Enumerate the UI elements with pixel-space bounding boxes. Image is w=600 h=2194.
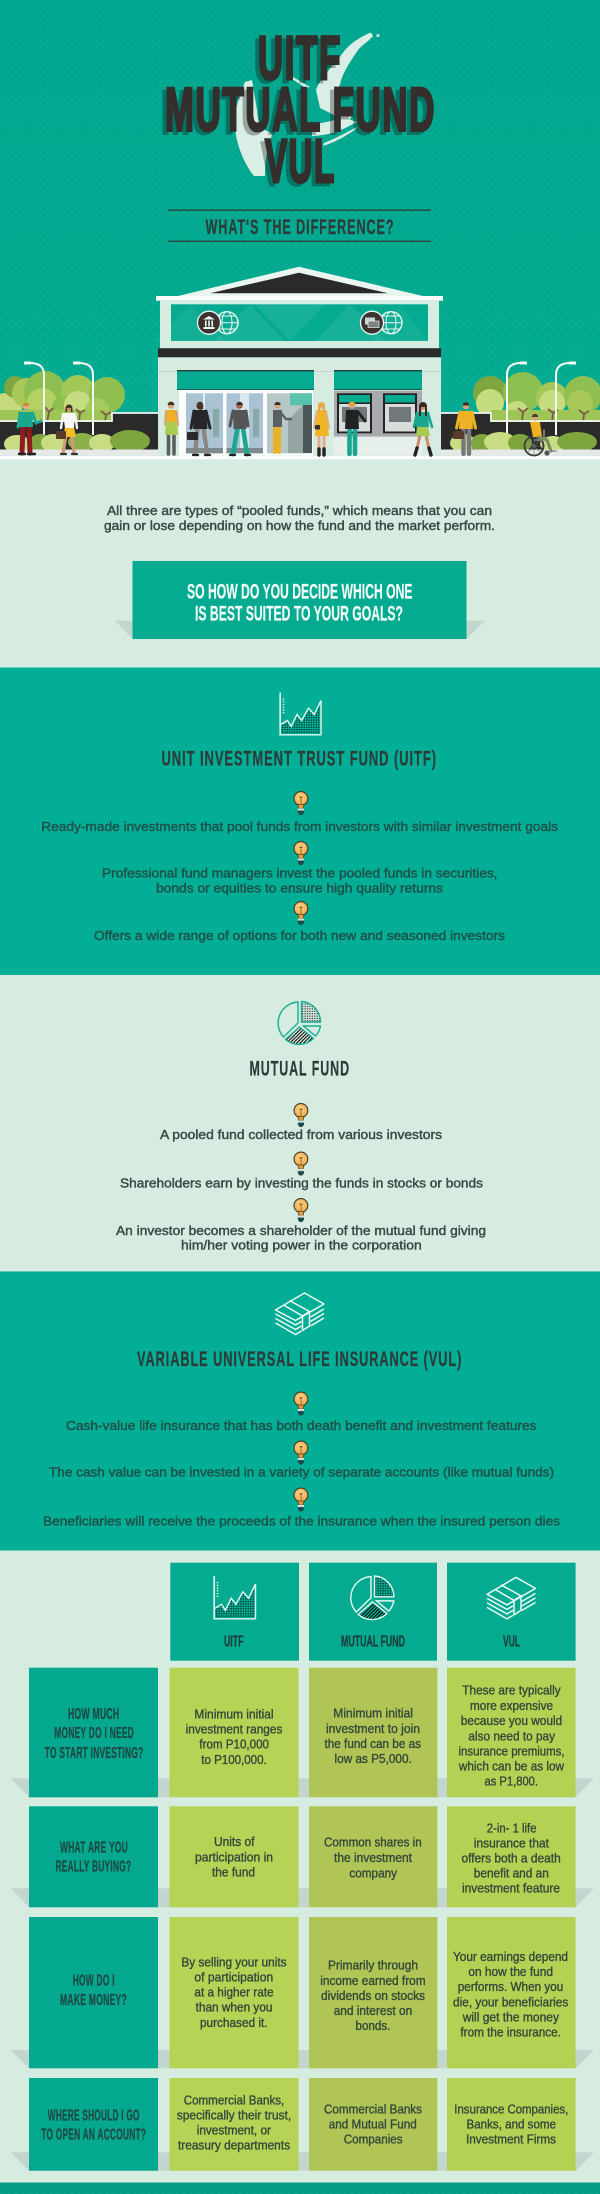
UITF answer: By selling your units [181, 1956, 287, 1970]
VUL answer: These are typically [462, 1684, 561, 1698]
title: UITF [258, 24, 342, 92]
icon: bulb 3 [294, 1199, 308, 1222]
text: mutual fund point 2: Shareholders earn by investing the funds in stocks or bonds [120, 1176, 484, 1191]
callout: decision banner: IS BEST SUITED TO YOUR GOALS? [195, 602, 403, 626]
icon: bulb 3 [294, 902, 308, 925]
UITF answer: treasury departments [178, 2138, 290, 2152]
question: HOW MUCH [68, 1706, 119, 1723]
table row: where to open an account [11, 2078, 594, 2171]
mutual fund answer: Companies [344, 2132, 403, 2146]
person: man with briefcase [187, 402, 210, 455]
text: UITF point 2 [102, 865, 498, 895]
mutual fund answer: the fund can be as [324, 1737, 421, 1751]
cornice [156, 296, 443, 301]
text block: intro: gain or lose depending on how the fund and the market perform. [104, 518, 495, 533]
title: VUL [265, 127, 336, 195]
VUL answer: Banks, and some [466, 2117, 556, 2131]
UITF answer [170, 2078, 298, 2171]
text: mutual fund point 1: A pooled fund collected from various investors [160, 1127, 443, 1142]
VUL answer: Your earnings depend [453, 1950, 568, 1964]
mutual fund answer: and Mutual Fund [329, 2117, 417, 2131]
title [165, 24, 436, 195]
person: wheelchair user [524, 414, 556, 456]
question: WHAT ARE YOU [60, 1839, 128, 1856]
question: WHERE SHOULD I GO [48, 2107, 140, 2124]
comparison table [11, 1563, 594, 2171]
mutual fund answer: Minimum initial [333, 1707, 413, 1721]
table header: VUL: VUL [503, 1634, 520, 1651]
UITF answer: from P10,000 [199, 1738, 269, 1752]
awning: left [177, 370, 314, 390]
icon: bulb 2 [294, 1152, 308, 1176]
VUL answer: offers both a death [462, 1852, 561, 1866]
panel: UITF [0, 668, 600, 975]
UITF answer: Minimum initial [194, 1707, 274, 1721]
table header: VUL [447, 1563, 576, 1661]
row ribbon [11, 2050, 594, 2068]
UITF answer: investment, or [197, 2123, 271, 2137]
lower wall [158, 357, 441, 456]
UITF answer: the fund [212, 1866, 255, 1880]
mutual fund answer [309, 1668, 437, 1797]
table row: what are you buying [11, 1806, 594, 1907]
illustration: bank building [155, 267, 443, 456]
icon: money and globe [360, 311, 402, 334]
VUL answer: benefit and an [474, 1867, 549, 1881]
text: VUL point 3: Beneficiaries will receive the proceeds of the insurance when the insured person dies [43, 1514, 561, 1529]
icon: bulb 2 [294, 1441, 308, 1464]
person: man at ATM [345, 402, 365, 454]
text: UITF point 3: Offers a wide range of options for both new and seasoned investors [94, 928, 506, 943]
VUL answer [447, 1917, 576, 2068]
VUL answer: Investment Firms [466, 2132, 556, 2146]
black band [158, 348, 441, 357]
panel: mutual fund [116, 1002, 486, 1252]
mutual fund answer: income earned from [320, 1974, 426, 1988]
VUL answer: 2-in- 1 life [487, 1821, 536, 1835]
mutual fund answer [309, 1806, 437, 1907]
illustration: sidewalk [0, 450, 600, 459]
UITF answer: Units of [214, 1835, 255, 1849]
question: TO START INVESTING? [45, 1745, 143, 1762]
row ribbon [11, 1888, 594, 1907]
person: woman in teal jacket [414, 402, 432, 455]
VUL answer: because you would [461, 1714, 562, 1728]
person: man in yellow sweater with bag [453, 402, 476, 454]
VUL answer: on how the fund [468, 1965, 553, 1979]
UITF answer [170, 1668, 298, 1797]
bank entrance doors [179, 390, 313, 456]
VUL answer: from the insurance. [460, 2026, 561, 2040]
mutual fund answer: bonds. [356, 2019, 390, 2033]
roof pediment [178, 267, 423, 296]
illustration: bushes [4, 430, 597, 453]
text: UITF point 1: Ready-made investments that pool funds from investors with similar investment goals [41, 819, 559, 834]
mutual fund answer [309, 1917, 437, 2068]
illustration: right street trees [473, 372, 600, 425]
UITF answer: Commercial Banks, [184, 2093, 284, 2107]
footer band [0, 2182, 600, 2194]
VUL answer: as P1,800. [484, 1774, 538, 1788]
question: MONEY DO I NEED [54, 1725, 134, 1742]
UITF answer: investment ranges [186, 1723, 282, 1737]
UITF answer: specifically their trust, [177, 2108, 291, 2122]
UITF answer [170, 1806, 298, 1907]
subtitle: WHAT'S THE DIFFERENCE? [206, 216, 394, 239]
table row: how much money [11, 1668, 594, 1797]
illustration: left street trees [0, 371, 125, 427]
question [29, 1917, 158, 2068]
UITF answer: at a higher rate [194, 1986, 274, 2000]
callout: decision banner: SO HOW DO YOU DECIDE WHICH ONE [187, 579, 412, 603]
UITF answer: purchased it. [200, 2016, 268, 2030]
mutual fund answer: dividends on stocks [321, 1989, 425, 2003]
person: woman with brown bag [56, 405, 77, 454]
question [29, 1806, 158, 1907]
icon: bulb 3 [294, 1488, 308, 1512]
text: VUL point 1: Cash-value life insurance that has both death benefit and investment features [66, 1418, 537, 1433]
UITF answer: of participation [194, 1971, 273, 1985]
mutual fund answer: investment to join [326, 1722, 420, 1736]
hero background [0, 0, 600, 456]
person: woman on phone [165, 402, 178, 454]
question: REALLY BUYING? [56, 1859, 131, 1876]
table header: UITF [170, 1563, 299, 1661]
text block: intro [104, 503, 495, 533]
UITF answer: to P100,000. [201, 1753, 267, 1767]
VUL answer: also need to pay [468, 1729, 556, 1743]
VUL answer: performs. When you [458, 1980, 563, 1994]
VUL answer [447, 1668, 576, 1797]
icon: pie chart [278, 1002, 321, 1044]
icon: bank and globe [198, 311, 238, 334]
panel: hero header [0, 0, 600, 459]
mutual fund answer [309, 2078, 437, 2171]
ATM area [334, 391, 422, 456]
mutual fund answer: and interest on [334, 2004, 412, 2018]
mutual fund answer: Common shares in [324, 1836, 422, 1850]
VUL answer: will get the money [462, 2011, 560, 2025]
table header: mutual fund: MUTUAL FUND [341, 1634, 405, 1651]
question: MAKE MONEY? [60, 1992, 127, 2009]
callout: decision banner [115, 561, 485, 639]
VUL answer: Insurance Companies, [454, 2102, 568, 2116]
VUL answer: insurance premiums, [458, 1744, 564, 1758]
UITF answer [170, 1917, 298, 2068]
text: VUL point 2: The cash value can be invested in a variety of separate accounts (like mutual funds) [49, 1465, 554, 1480]
mutual fund answer: the investment [334, 1851, 412, 1865]
text: UITF point 2: bonds or equities to ensure high quality returns [156, 880, 444, 895]
question [29, 2078, 158, 2171]
text: mutual fund point 3: An investor becomes a shareholder of the mutual fund giving [116, 1223, 486, 1238]
table row: how do I make money [11, 1917, 594, 2068]
VUL answer: more expensive [470, 1699, 553, 1713]
VUL answer [447, 1806, 576, 1907]
text: UITF point 2: Professional fund managers invest the pooled funds in securities, [102, 865, 498, 880]
icon: bulb 1 [294, 1392, 308, 1416]
panel: VUL [0, 1271, 600, 1550]
illustration: boundary walls [0, 413, 600, 450]
text block: intro: All three are types of “pooled funds,” which means that you can [107, 503, 492, 518]
bank sign [155, 304, 428, 341]
awning: right [334, 370, 422, 390]
mutual fund answer: company [349, 1866, 398, 1880]
mutual fund answer: Commercial Banks [324, 2102, 422, 2116]
table header: mutual fund [309, 1563, 437, 1661]
VUL answer: which can be as low [458, 1759, 565, 1773]
upper wall [160, 301, 439, 348]
mutual fund answer: low as P5,000. [334, 1752, 412, 1766]
UITF answer: participation in [195, 1850, 273, 1864]
person: man in teal trousers [230, 402, 250, 455]
table header: UITF: UITF [224, 1634, 244, 1651]
VUL answer: die, your beneficiaries [453, 1995, 568, 2009]
illustration: street lamps [24, 363, 576, 435]
icon: bulb 1 [294, 792, 308, 815]
UITF answer: than when you [196, 2001, 272, 2015]
question: TO OPEN AN ACCOUNT? [41, 2127, 146, 2144]
VUL answer [447, 2078, 576, 2171]
icon: bulb 2 [294, 842, 308, 865]
question [29, 1668, 158, 1797]
brush stroke behind title [235, 32, 380, 176]
mutual fund answer: Primarily through [328, 1959, 418, 1973]
person: man at counter [273, 402, 291, 452]
person: man in teal sweater [18, 403, 41, 454]
icon: line chart [280, 692, 322, 735]
heading: mutual fund: MUTUAL FUND [250, 1056, 350, 1080]
VUL answer: insurance that [474, 1837, 549, 1851]
icon: bulb 1 [294, 1104, 308, 1127]
row ribbon [11, 2152, 594, 2171]
text: mutual fund point 3: him/her voting power in the corporation [181, 1237, 422, 1252]
question: HOW DO I [73, 1973, 115, 1990]
text: mutual fund point 3 [116, 1223, 486, 1252]
person: woman in yellow dress [314, 402, 329, 455]
row ribbon [11, 1778, 594, 1797]
icon: stack of money [276, 1293, 324, 1334]
VUL answer: investment feature [462, 1882, 560, 1896]
